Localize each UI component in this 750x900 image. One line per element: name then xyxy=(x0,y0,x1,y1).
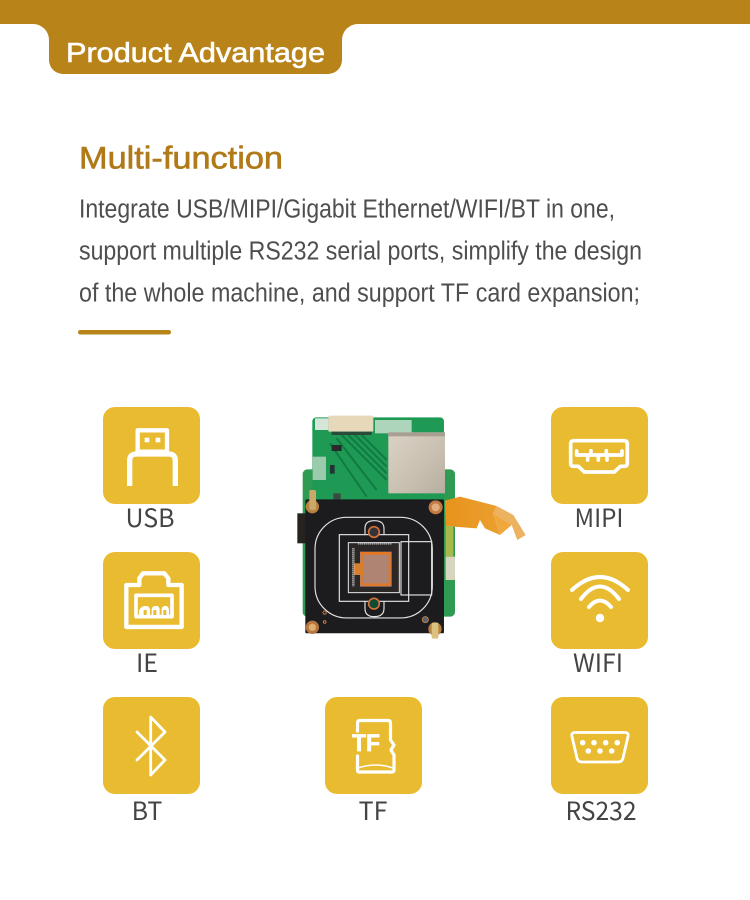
silkscreen outlines xyxy=(315,517,432,618)
mounting holes xyxy=(369,527,379,537)
feature: BT: BT xyxy=(132,792,162,828)
description text block: Integrate USB/MIPI/Gigabit Ethernet/WIFI/BT in one, xyxy=(79,196,615,224)
icon: ethernet port xyxy=(126,573,182,627)
feature: TF: TF xyxy=(359,792,388,828)
image sensor xyxy=(348,543,399,593)
feature: USB: USB xyxy=(126,499,174,535)
feature: MIPI xyxy=(551,407,648,535)
lower green board xyxy=(303,469,455,617)
banner title: Product Advantage xyxy=(66,37,325,68)
feature: RS232 xyxy=(551,697,648,828)
side connector xyxy=(297,513,307,543)
icon: WiFi xyxy=(572,577,628,622)
icon: USB plug xyxy=(130,430,175,486)
black camera board xyxy=(305,499,444,633)
feature: WIFI: WIFI xyxy=(573,644,623,680)
header banner with tab xyxy=(0,0,750,74)
upper green board xyxy=(312,417,444,501)
feature: RS232: RS232 xyxy=(566,792,636,828)
icon: MIPI connector xyxy=(571,441,627,472)
ethernet jack xyxy=(388,432,445,493)
feature: IE xyxy=(103,552,200,680)
description text block: of the whole machine, and support TF card expansion; xyxy=(79,280,640,308)
board connector xyxy=(328,416,373,432)
accent underline xyxy=(78,330,171,334)
heading: Multi-function: Multi-function xyxy=(79,140,283,176)
feature: TF xyxy=(325,697,422,828)
description text block xyxy=(79,196,642,308)
icon: Bluetooth xyxy=(137,717,165,775)
feature: WIFI xyxy=(551,552,648,680)
product photo: camera module board xyxy=(297,416,526,639)
feature: MIPI: MIPI xyxy=(574,499,624,535)
icon: serial port xyxy=(572,732,628,762)
feature: USB xyxy=(103,407,200,535)
icon: TF card: TF xyxy=(352,730,380,757)
feature: BT xyxy=(103,697,200,828)
corner screws xyxy=(306,500,319,513)
feature: IE: IE xyxy=(136,644,158,680)
flex cable xyxy=(445,497,526,557)
description text block: support multiple RS232 serial ports, simplify the design xyxy=(79,238,642,266)
